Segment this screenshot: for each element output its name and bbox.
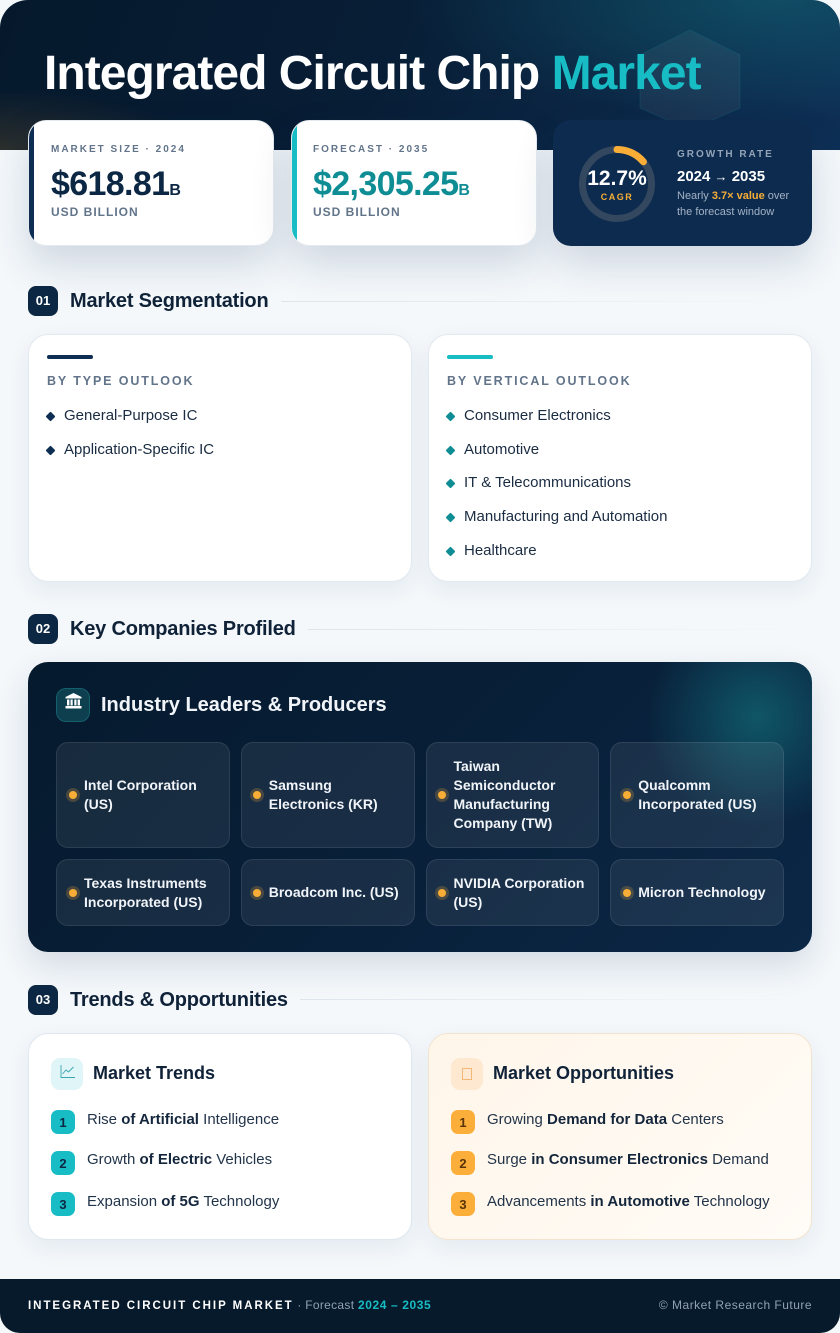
company: texas instruments: Texas Instruments bbox=[84, 875, 207, 891]
stat card: market size bbox=[28, 120, 274, 246]
trend 3 badge: 3 bbox=[59, 1197, 67, 1212]
company: broadcom bbox=[241, 859, 414, 926]
opportunity 1 text: Growing Demand for Data Centers bbox=[487, 1110, 724, 1128]
growth note: the forecast window bbox=[677, 206, 774, 218]
footer bbox=[0, 1279, 840, 1333]
company: intel: Intel Corporation bbox=[84, 777, 197, 793]
opportunity 3 badge bbox=[451, 1192, 475, 1216]
list item: Consumer Electronics bbox=[464, 407, 611, 424]
icon: bank building bbox=[56, 688, 90, 722]
opportunity 3 badge: 3 bbox=[459, 1197, 467, 1212]
hexagon decoration bbox=[640, 30, 740, 120]
company: nvidia: NVIDIA Corporation bbox=[454, 875, 584, 891]
panel: market opportunities bbox=[428, 1033, 812, 1240]
CAGR label: CAGR bbox=[601, 192, 633, 202]
opportunity 1 badge bbox=[451, 1110, 475, 1134]
stat card: forecast: USD BILLION bbox=[313, 205, 401, 219]
panel heading: Industry Leaders & Producers bbox=[101, 694, 387, 716]
company: texas instruments: Incorporated (US) bbox=[84, 894, 202, 910]
list item: Automotive bbox=[464, 441, 539, 458]
section heading: market segmentation: Market Segmentation bbox=[70, 290, 268, 312]
opportunity 2 badge: 2 bbox=[459, 1156, 467, 1171]
section number 03 bbox=[28, 985, 58, 1015]
stat card: forecast: $2,305.25B bbox=[313, 165, 470, 203]
section number 01 bbox=[28, 286, 58, 316]
company: qualcomm: Incorporated (US) bbox=[638, 796, 756, 812]
trend 2 badge bbox=[51, 1151, 75, 1175]
trend 2 text: Growth of Electric Vehicles bbox=[87, 1151, 272, 1168]
section number 02: 02 bbox=[36, 621, 50, 636]
opportunity 2 badge bbox=[451, 1151, 475, 1175]
panel: industry leaders bbox=[28, 662, 812, 952]
panel heading: vertical: BY VERTICAL OUTLOOK bbox=[447, 374, 631, 388]
opportunity 3 text: Advancements in Automotive Technology bbox=[487, 1192, 770, 1210]
company: tsmc bbox=[426, 742, 599, 848]
stat card: growth rate bbox=[553, 120, 812, 246]
trend 1 badge: 1 bbox=[59, 1115, 67, 1130]
growth note bbox=[677, 190, 789, 218]
panel heading: Market Trends bbox=[93, 1063, 215, 1083]
footer title: INTEGRATED CIRCUIT CHIP MARKET · Forecast 2024 – 2035 bbox=[28, 1298, 431, 1312]
icon: placeholder glyph bbox=[451, 1058, 483, 1090]
list item: Application-Specific IC bbox=[64, 441, 214, 458]
section heading: trends: Trends & Opportunities bbox=[70, 989, 288, 1011]
opportunity 1 badge: 1 bbox=[459, 1115, 467, 1130]
section heading: key companies: Key Companies Profiled bbox=[70, 618, 296, 640]
stat card: forecast bbox=[291, 120, 537, 246]
company: samsung: Samsung bbox=[269, 777, 332, 793]
CAGR value: 12.7% bbox=[587, 167, 647, 190]
growth years: 2024 → 2035 bbox=[677, 168, 765, 184]
donut chart bbox=[579, 146, 655, 222]
panel: market trends bbox=[28, 1033, 412, 1240]
list item: General-Purpose IC bbox=[64, 407, 197, 424]
trend 3 text: Expansion of 5G Technology bbox=[87, 1192, 279, 1210]
section number 03: 03 bbox=[36, 992, 50, 1007]
company: tsmc: Manufacturing bbox=[454, 796, 550, 812]
company: tsmc: Taiwan bbox=[454, 758, 500, 774]
list item: IT & Telecommunications bbox=[464, 474, 631, 491]
company: intel: (US) bbox=[84, 796, 113, 812]
growth label: GROWTH RATE bbox=[677, 148, 774, 160]
icon: chart bbox=[51, 1058, 83, 1090]
company: qualcomm: Qualcomm bbox=[638, 777, 711, 793]
stat card: market size: $618.81B bbox=[51, 165, 181, 203]
company: texas instruments bbox=[56, 859, 230, 926]
trend 1 text: Rise of Artificial Intelligence bbox=[87, 1110, 279, 1128]
company: micron bbox=[610, 859, 784, 926]
company: micron: Micron Technology bbox=[638, 884, 766, 900]
company: tsmc: Semiconductor bbox=[454, 777, 555, 793]
panel heading: type: BY TYPE OUTLOOK bbox=[47, 374, 194, 388]
footer credit: © Market Research Future bbox=[659, 1298, 812, 1312]
list item: Manufacturing and Automation bbox=[464, 508, 667, 525]
opportunity 2 text: Surge in Consumer Electronics Demand bbox=[487, 1151, 769, 1168]
growth note: Nearly 3.7× value over bbox=[677, 190, 789, 202]
title: Integrated Circuit Chip Market bbox=[44, 47, 701, 100]
company: samsung bbox=[241, 742, 414, 848]
stat card: market size: MARKET SIZE · 2024 bbox=[51, 144, 186, 154]
company: nvidia bbox=[426, 859, 599, 926]
company: tsmc: Company (TW) bbox=[454, 815, 552, 831]
stat card: forecast: FORECAST · 2035 bbox=[313, 144, 429, 154]
company: qualcomm bbox=[610, 742, 784, 848]
company: samsung: Electronics (KR) bbox=[269, 796, 378, 812]
section number 02 bbox=[28, 614, 58, 644]
stat card: market size: USD BILLION bbox=[51, 205, 139, 219]
company: broadcom: Broadcom Inc. (US) bbox=[269, 884, 399, 900]
trend 1 badge bbox=[51, 1110, 75, 1134]
trend 3 badge bbox=[51, 1192, 75, 1216]
list item: Healthcare bbox=[464, 542, 537, 559]
panel heading: Market Opportunities bbox=[493, 1063, 674, 1083]
trend 2 badge: 2 bbox=[59, 1156, 67, 1171]
section number 01: 01 bbox=[36, 293, 50, 308]
hero header bbox=[0, 0, 840, 150]
company: intel bbox=[56, 742, 230, 848]
panel: by vertical outlook bbox=[428, 334, 812, 582]
panel: by type outlook bbox=[28, 334, 412, 582]
company: nvidia: (US) bbox=[454, 894, 482, 910]
